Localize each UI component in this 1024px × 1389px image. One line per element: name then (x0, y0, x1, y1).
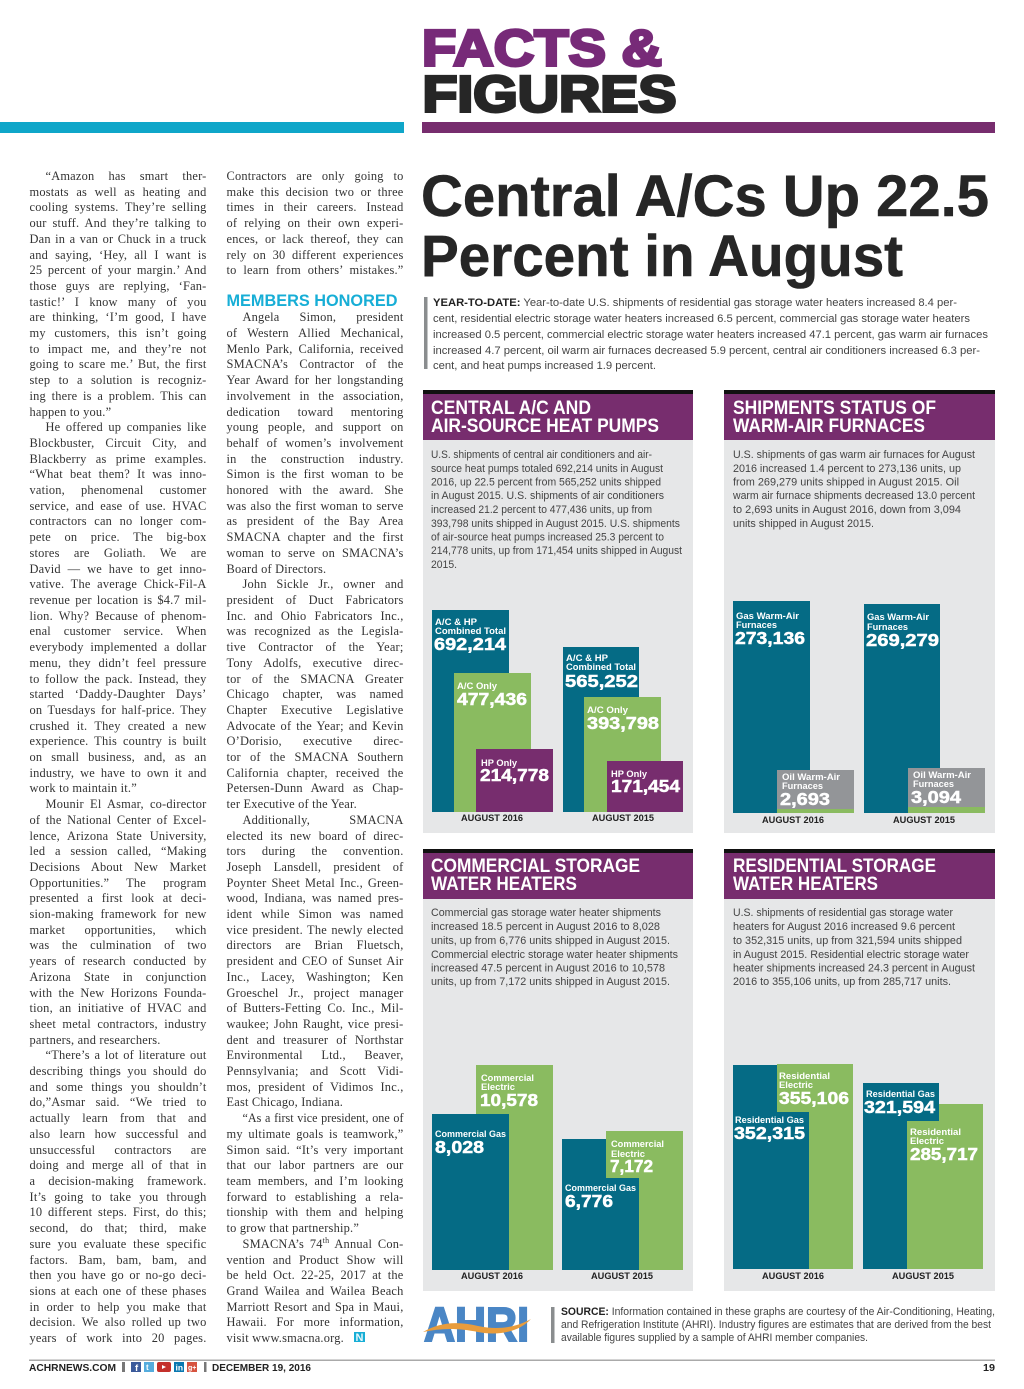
year-to-date summary: YEAR-TO-DATE: Year-to-date U.S. shipments of residential gas storage water heaters increased 8.4 per- (433, 297, 957, 309)
article text column 2: Simon said. “It’s very important (226, 1143, 404, 1157)
bar chart: august 2016: Furnaces (736, 619, 777, 630)
panel: commercial storage water heaters (423, 849, 693, 1291)
article text column 1: happen to you.” (30, 405, 111, 419)
source note: and Refrigeration Institute (AHRI). Industry figures are estimates that are derived from the best (561, 1319, 992, 1331)
bar chart: august 2015: 171,454 (611, 776, 680, 796)
article text column 2: Simon is the first woman to be (226, 467, 404, 481)
article text column 2: was also the first woman to serve (226, 499, 404, 513)
article text column 1: was the culmination of two (30, 938, 206, 952)
article text column 1: describing things you should do (30, 1064, 206, 1078)
bar chart: august 2015: 7,172 (610, 1156, 653, 1176)
article text column 2: ident while Simon was named (226, 907, 404, 921)
article text column 1: factors. Bam, bam, bam, and (30, 1253, 206, 1267)
article text column 1: sion-making framework for new (30, 907, 206, 921)
article text column 2: Petersen-Dunn Award as Chap- (226, 781, 404, 795)
bar chart: august 2016 (432, 610, 553, 824)
article text column 2 (226, 169, 404, 1345)
icon: AHRI logo: AHRI (424, 1299, 529, 1352)
panel body text: heaters for August 2016 increased 9.6 percent (733, 921, 956, 933)
bar chart: august 2016: AUGUST 2016 (762, 815, 824, 826)
bar chart: august 2015: Commercial Gas (565, 1182, 636, 1193)
bar chart: august 2016: AUGUST 2016 (762, 1271, 824, 1282)
bar chart: august 2015: Residential (910, 1126, 961, 1137)
article text column 2: that our labor partners are our (226, 1158, 404, 1172)
panel body text: to 352,315 units, up from 321,594 units shipped (733, 935, 962, 947)
panel body text: from 269,279 units shipped in August 2015. Oil (733, 476, 959, 488)
article text column 2: my ultimate goals is teamwork,” (226, 1127, 404, 1141)
panel body text: source heat pumps totaled 692,214 units in August (431, 463, 664, 475)
article text column 1: sure you evaluate these specific (30, 1237, 206, 1251)
article text column 2: Year Award for her longstanding (226, 373, 404, 387)
article text column 2: of relying on their own experi- (226, 216, 404, 230)
bar chart: august 2015: Oil Warm-Air (913, 769, 971, 780)
bar chart: august 2016: 477,436 (457, 689, 527, 709)
panel body text: U.S. shipments of residential gas storage water (733, 907, 953, 919)
panel body text: 393,798 units shipped in August 2015. U.S. shipments (431, 518, 680, 530)
panel: residential storage water heaters (724, 849, 995, 1291)
panel heading (431, 855, 640, 895)
article text column 2: times in their careers. Instead (226, 200, 404, 214)
article text column 1: mostats as well as heating and (30, 185, 206, 199)
article text column 1: then you have go or no-go deci- (30, 1268, 206, 1282)
article text column 1: doing and merge all of that in (30, 1158, 206, 1172)
article text column 2: Grand Wailea and Wailea Beach (226, 1284, 404, 1298)
article text column 1: and saying, ‘Hey, all I want is (30, 248, 206, 262)
panel body text: units shipped in August 2015. (733, 518, 874, 530)
article text column 2: Chapter Executive Legislative (226, 703, 404, 717)
bar chart: august 2016: AUGUST 2016 (461, 813, 523, 824)
bar chart: august 2016: Residential (779, 1070, 830, 1081)
bar chart: august 2016: 214,778 (480, 765, 549, 785)
bar chart: august 2015: 3,094 (911, 787, 961, 807)
article text column 1: everybody implemented a dollar (30, 640, 206, 654)
article text column 1: lence, Arizona State University, (30, 829, 206, 843)
panel heading: WATER HEATERS (733, 873, 878, 895)
bar chart: august 2015: HP Only (611, 768, 648, 779)
bar chart: august 2016: AUGUST 2016 (461, 1271, 523, 1282)
bar chart: august 2015 (863, 1083, 983, 1282)
article text column 1: to follow the pack. Instead, they (30, 672, 206, 686)
article text column 2: to learn from others’ mistakes.” (226, 263, 404, 277)
article text column 1: “Amazon has smart ther- (46, 169, 206, 183)
article text column 2: “As a first vice president, one of (242, 1111, 404, 1125)
article text column 2: of Western Allied Mechanical, (226, 326, 404, 340)
panel body text (431, 449, 683, 571)
bar chart: august 2016: Electric (779, 1079, 813, 1090)
source note: available figures supplied by a sample of AHRI member companies. (561, 1332, 868, 1344)
article text column 2: make this decision two or three (226, 185, 404, 199)
article text column 1: going to scare me.’ But, the first (30, 357, 206, 371)
bar chart: august 2016: Furnaces (782, 780, 823, 791)
panel body text: increased 18.5 percent in August 2016 to 8,028 (431, 921, 660, 933)
article text column 1: with the New Horizons Founda- (30, 986, 206, 1000)
panel body text: 2016 increased 1.4 percent to 273,136 units, up (733, 463, 961, 475)
bar chart: august 2015: Furnaces (913, 778, 954, 789)
bar chart: august 2016: Oil Warm-Air (782, 771, 840, 782)
bar chart: august 2016: Residential Gas (735, 1114, 804, 1125)
article text column 1: tastic!’ I know many of you (30, 295, 206, 309)
article text column 1: and some things you shouldn’t (30, 1080, 206, 1094)
article text column 2: wood, Indiana, was named pres- (226, 891, 404, 905)
article text column 2: involvement in the association, (226, 389, 404, 403)
article text column 1: sions at each one of these phases (30, 1284, 206, 1298)
article text column 1: tion, an initiative of HVAC and (30, 1001, 206, 1015)
article text column 2: tor of the SMACNA Southern (226, 750, 404, 764)
article text column 2: Contractors are only going to (226, 169, 404, 183)
article text column 1: do,”Asmar said. “We tried to (30, 1095, 206, 1109)
bar chart: august 2016: 8,028 (435, 1137, 484, 1157)
bar chart: august 2016 (733, 1064, 853, 1282)
article text column 1: years of work into 20 pages. (30, 1331, 206, 1345)
bar chart: august 2015: 285,717 (910, 1144, 978, 1164)
bar chart: august 2016: 692,214 (434, 634, 506, 654)
article text column 1: Arizona State in conjunction (30, 970, 206, 984)
article text column 2: elected its new board of direc- (226, 829, 404, 843)
article text column 1: vative. The average Chick-Fil-A (30, 577, 206, 591)
article text column 2: president of Duct Fabricators (226, 593, 404, 607)
article text column 2: Pennsylvania; and Scott Vidi- (226, 1064, 404, 1078)
article text column 1: also learn how successful and (30, 1127, 206, 1141)
panel body text: 2016 to 355,106 units, up from 285,717 units. (733, 976, 951, 988)
article text column 1: step to a solution is recogniz- (30, 373, 206, 387)
article text column 1: Opportunities.” The program (30, 876, 206, 890)
article text column 1: cooling systems. They’re selling (30, 200, 206, 214)
article text column 2: ter Executive of the Year. (226, 797, 357, 811)
article text column 2: Groeschel Jr., project manager (226, 986, 404, 1000)
year-to-date summary: increased 4.7 percent, oil warm air furnaces decreased 5.9 percent, central air conditioners increased 6.3 per- (433, 345, 980, 357)
bar chart: august 2016: HP Only (481, 757, 518, 768)
article text column 2: Chicago chapter, was named (226, 687, 404, 701)
article text column 2: SMACNA chapter and the first (226, 530, 404, 544)
article text column 2: be held Oct. 22-25, 2017 at the (226, 1268, 404, 1282)
article text column 2: Inc., Lacey, Washington; Ken (226, 970, 404, 984)
bar chart: august 2015: Residential Gas (866, 1088, 935, 1099)
article text column 2: O’Dorisio, executive direc- (226, 734, 404, 748)
year-to-date summary: cent, and heat pumps increased 1.9 percent. (433, 360, 656, 372)
panel heading: SHIPMENTS STATUS OF (733, 397, 936, 419)
article text column 1: enal customer service. When (30, 624, 206, 638)
bar chart: august 2015: 269,279 (866, 630, 939, 650)
bar chart: august 2016: 355,106 (779, 1088, 849, 1108)
footer: publication and date: DECEMBER 19, 2016 (212, 1363, 311, 1374)
article text column 2: Marriott Resort and Spa in Maui, (226, 1300, 404, 1314)
article text column 2: mos, president of Vidimos Inc., (226, 1080, 404, 1094)
bar chart: august 2016 (432, 1065, 553, 1282)
article text column 2: president and CEO of Sunset Air (226, 954, 404, 968)
bar chart: august 2016: 2,693 (780, 789, 830, 809)
social icons: g+ (188, 1365, 196, 1372)
article text column 1: contractors can no longer com- (30, 514, 206, 528)
panel heading (431, 397, 659, 437)
article text column 1: partners, and researchers. (30, 1033, 161, 1047)
panel heading (733, 397, 936, 437)
panel heading (733, 855, 936, 895)
panel body text: 2016, up 22.5 percent from 565,252 units shipped (431, 476, 661, 488)
article text column 2: Menlo Park, California, received (226, 342, 404, 356)
article text column 2: vice president. The newly elected (226, 923, 404, 937)
article text column 2: visit www.smacna.org. (226, 1331, 344, 1345)
article text column 1: in order to help you make that (30, 1300, 206, 1314)
bar chart: august 2015 (864, 604, 985, 826)
section title: facts and figures: FACTS & (422, 20, 662, 76)
panel heading: WARM-AIR FURNACES (733, 415, 925, 437)
cyan header rule (0, 122, 404, 133)
article text column 2: young people, and support on (226, 420, 404, 434)
article text column 1: Dan in a van or Chuck in a truck (30, 232, 206, 246)
year-to-date summary: cent, residential electric storage water heaters increased 6.5 percent, commercial gas storage water heaters (433, 313, 970, 325)
article text column 1: second, do that; third, make (30, 1221, 206, 1235)
article text column 1: Decisions About New Market (30, 860, 206, 874)
article text column 1: actually learn from that and (30, 1111, 206, 1125)
bar chart: august 2016: Electric (481, 1081, 515, 1092)
panel body text: Commercial electric storage water heater shipments (431, 949, 678, 961)
article text column 1: vation, phenomenal customer (30, 483, 206, 497)
article text column 2: directors are Brian Fluetsch, (226, 938, 404, 952)
article text column 2: honored with the award. She (226, 483, 404, 497)
panel body text: U.S. shipments of central air conditioners and air- (431, 449, 652, 461)
article text column 1: Mounir El Asmar, co-director (46, 797, 206, 811)
article text column 1: Blockbuster, Circuit City, and (30, 436, 206, 450)
bar chart: august 2015 (563, 647, 683, 824)
article text column 2: ences, or lack thereof, they can (226, 232, 404, 246)
heading: members honored: MEMBERS HONORED (226, 292, 397, 310)
bar chart: august 2015: Commercial (611, 1138, 664, 1149)
section title: facts and figures: FIGURES (422, 66, 676, 122)
article text column 1: lion. Why? Because of phenom- (30, 609, 206, 623)
panel heading: COMMERCIAL STORAGE (431, 855, 640, 877)
bar chart: august 2016: A/C & HP (435, 616, 477, 627)
article text column 1: experience. This country is built (30, 734, 206, 748)
article text column 1: led a session called, “Making (30, 844, 206, 858)
bar chart: august 2015 (562, 1131, 683, 1282)
panel heading: RESIDENTIAL STORAGE (733, 855, 936, 877)
article text column 2: Inc. and Ohio Fabricators Inc., (226, 609, 404, 623)
article text column 2: Angela Simon, president (242, 310, 404, 324)
source note: SOURCE: Information contained in these graphs are courtesy of the Air-Conditioning, Heating, (561, 1306, 995, 1318)
article text column 1: “What beat them? It was inno- (30, 467, 206, 481)
article text column 2: SMACNA’s 74th Annual Con- (242, 1236, 404, 1251)
bar chart: august 2015: A/C & HP (566, 652, 608, 663)
article text column 2: Tony Adolfs, executive direc- (226, 656, 404, 670)
source note (551, 1306, 995, 1344)
headline: Central A/Cs Up 22.5 (421, 164, 989, 229)
panel body text: of air-source heat pumps increased 25.3 percent to (431, 532, 664, 544)
bar chart: august 2016 (733, 601, 854, 826)
article text column 2: dent and treasurer of Northstar (226, 1033, 404, 1047)
article text column 1: “There’s a lot of literature out (46, 1048, 206, 1062)
article text column 2: Joseph Lansdell, president of (226, 860, 404, 874)
panel body text: warm air furnace shipments decreased 13.0 percent (732, 490, 976, 502)
panel: shipments status of warm-air furnaces (724, 390, 995, 833)
bar chart: august 2016: Commercial Gas (435, 1128, 506, 1139)
bar chart: august 2015: AUGUST 2015 (893, 815, 956, 826)
article text column 1: started ‘Daddy-Daughter Days’ (30, 687, 206, 701)
panel body text (732, 449, 976, 530)
article text column 1: of the National Center of Excel- (30, 813, 206, 827)
panel heading: AIR-SOURCE HEAT PUMPS (431, 415, 659, 437)
article text column 1: sheet metal contractors, industry (30, 1017, 206, 1031)
article text column 2: waukee; John Raught, vice presi- (226, 1017, 404, 1031)
panel heading: WATER HEATERS (431, 873, 577, 895)
article text column 2: California chapter, received the (226, 766, 404, 780)
social icons: t (146, 1363, 149, 1372)
article text column 1: on Tuesdays for half-price. They (30, 703, 206, 717)
article text column 2: vention and Product Show will (226, 1253, 404, 1267)
bar chart: august 2015: Combined Total (566, 661, 636, 672)
bar chart: august 2015: 321,594 (864, 1097, 935, 1117)
bar chart: august 2015: AUGUST 2015 (892, 1271, 955, 1282)
article text column 2: of Butters-Fetting Co. Inc., Mil- (226, 1001, 404, 1015)
article text column 2: dedication toward mentoring (226, 405, 404, 419)
article text column 2: SMACNA’s Contractor of the (226, 357, 404, 371)
article text column 2: tionship with them and helping (226, 1205, 404, 1219)
headline (421, 164, 989, 289)
social icons: f (135, 1363, 139, 1374)
article text column 1: to impact me, and they’re not (30, 342, 206, 356)
bar chart: august 2016: Gas Warm-Air (736, 610, 799, 621)
bar chart: august 2016: A/C Only (457, 680, 498, 691)
panel body text (733, 907, 976, 988)
year-to-date summary: increased 0.5 percent, commercial electric storage water heaters increased 47.1 percent, gas warm air furnaces (433, 329, 988, 341)
article text column 1: Blackberry as prime examples. (30, 452, 206, 466)
article text column 2: tors during the convention. (226, 844, 404, 858)
article text column 1: market opportunities, which (30, 923, 206, 937)
article text column 2: Advocate of the Year; and Kevin (226, 719, 404, 733)
article text column 1: 10 different steps. First, do this; (30, 1205, 206, 1219)
section title: facts and figures (422, 20, 676, 122)
article text column 2: in the construction industry. (226, 452, 404, 466)
article text column 1: David — we have to get inno- (30, 562, 206, 576)
article text column 2: team members, and I’m looking (226, 1174, 404, 1188)
article text column 2: rely on 30 different experiences (226, 248, 404, 262)
article text column 1: those guys are replying, ‘Fan- (30, 279, 206, 293)
article text column 2: Additionally, SMACNA (242, 813, 404, 827)
bar chart: august 2015: Furnaces (867, 621, 908, 632)
bar chart: august 2016: Combined Total (435, 625, 506, 636)
panel body text: units, up from 6,776 units shipped in August 2015. (431, 935, 670, 947)
bar chart: august 2015: Gas Warm-Air (867, 611, 929, 622)
panel body text: increased 47.5 percent in August 2016 to 10,578 (431, 962, 665, 974)
article text column 2: Environmental Ltd., Beaver, (226, 1048, 404, 1062)
panel body text: units, up from 7,172 units shipped in August 2015. (431, 976, 670, 988)
panel body text: increased 21.2 percent to 477,436 units, up from (431, 504, 652, 516)
article text column 1: years of research conducted by (30, 954, 206, 968)
panel body text: 214,778 units, up from 171,454 units shipped in August (431, 545, 683, 557)
article text column 1: unsuccessful contractors are (30, 1143, 206, 1157)
article text column 2: as president of the Bay Area (226, 514, 404, 528)
panel body text: Commercial gas storage water heater shipments (431, 907, 661, 919)
bar chart: august 2015: 393,798 (587, 713, 659, 733)
article text column 1: work to maintain it.” (30, 781, 137, 795)
article text column 1: my customers, this isn’t going (30, 326, 206, 340)
article text column 2: was recognized as the Legisla- (226, 624, 404, 638)
panel body text: heater shipments increased 24.3 percent in August (733, 962, 976, 974)
article text column 1: crushed it. They created a new (30, 719, 206, 733)
icon: end-of-article N mark: N (356, 1332, 364, 1344)
article text column 2: woman to serve on SMACNA’s (226, 546, 404, 560)
panel body text: in August 2015. Residential electric storage water (733, 949, 969, 961)
bar chart: august 2015: AUGUST 2015 (591, 1271, 654, 1282)
bar chart: august 2016: Commercial (481, 1072, 534, 1083)
article text column 1: revenue per location is $4.7 mil- (30, 593, 206, 607)
article text column 1: pete on price. The big-box (30, 530, 206, 544)
panel body text (431, 907, 678, 988)
article text column 2: forward to establishing a rela- (226, 1190, 404, 1204)
page number: 19 (983, 1363, 995, 1374)
bar chart: august 2016: 352,315 (734, 1123, 805, 1143)
bar chart: august 2015: Electric (611, 1148, 645, 1159)
bar chart: august 2015: AUGUST 2015 (592, 813, 655, 824)
purple header rule (422, 122, 995, 133)
article text column 2: behalf of women’s involvement (226, 436, 404, 450)
panel body text: 2015. (431, 559, 457, 571)
article text column 1: presented a first look at deci- (30, 891, 206, 905)
article text column 2: Hawaii. For more information, (226, 1315, 404, 1329)
article text column 1: a decision-making framework. (30, 1174, 206, 1188)
article text column 1: service, and ease of use. HVAC (30, 499, 206, 513)
article text column 2: tive Contractor of the Year; (226, 640, 404, 654)
article text column 2: John Sickle Jr., owner and (242, 577, 404, 591)
article text column 2: Board of Directors. (226, 562, 326, 576)
footer: publication and date: ACHRNEWS.COM (29, 1363, 116, 1374)
article text column 1: menu, they didn’t feel pressure (30, 656, 206, 670)
article text column 2: East Chicago, Indiana. (226, 1095, 343, 1109)
article text column 1: ing there is a problem. This can (30, 389, 206, 403)
bar chart: august 2015: Electric (910, 1135, 944, 1146)
panel body text: to 2,693 units in August 2016, down from 3,094 (733, 504, 961, 516)
panel: central a/c and air-source heat pumps (423, 390, 693, 833)
article text column 1: It’s going to take you through (30, 1190, 206, 1204)
article text column 1: on small business, and, as an (30, 750, 206, 764)
article text column 1: decision. We also rolled up two (30, 1315, 206, 1329)
footer: publication and date (29, 1362, 311, 1374)
article text column 2: tor of the SMACNA Greater (226, 672, 404, 686)
article text column 1: He offered up companies like (46, 420, 206, 434)
bar chart: august 2015: 565,252 (565, 671, 638, 691)
panel body text: in August 2015. U.S. shipments of air conditioners (431, 490, 664, 502)
panel body text: U.S. shipments of gas warm air furnaces for August (733, 449, 976, 461)
article text column 1: our stuff. And they’re talking to (30, 216, 206, 230)
article text column 2: Poynter Sheet Metal Inc., Green- (226, 876, 404, 890)
year-to-date summary (424, 297, 988, 372)
bar chart: august 2015: A/C Only (587, 704, 629, 715)
social icons (131, 1362, 197, 1374)
headline: Percent in August (421, 224, 903, 289)
bar chart: august 2016: 10,578 (480, 1090, 538, 1110)
article text column 1: industry, we have to own it and (30, 766, 206, 780)
footer rule (29, 1360, 995, 1361)
social icons: in (176, 1362, 183, 1372)
bar chart: august 2016: 273,136 (735, 628, 805, 648)
article text column 1: are thinking, ‘I’m good, I have (30, 310, 206, 324)
article text column 1: stores are Goliath. We are (30, 546, 206, 560)
article text column 1 (30, 169, 206, 1345)
bar chart: august 2015: 6,776 (565, 1191, 613, 1211)
article text column 1: 25 percent of your margin.’ And (30, 263, 206, 277)
panel heading: CENTRAL A/C AND (431, 397, 591, 419)
article text column 2: to grow that partnership.” (226, 1221, 359, 1235)
